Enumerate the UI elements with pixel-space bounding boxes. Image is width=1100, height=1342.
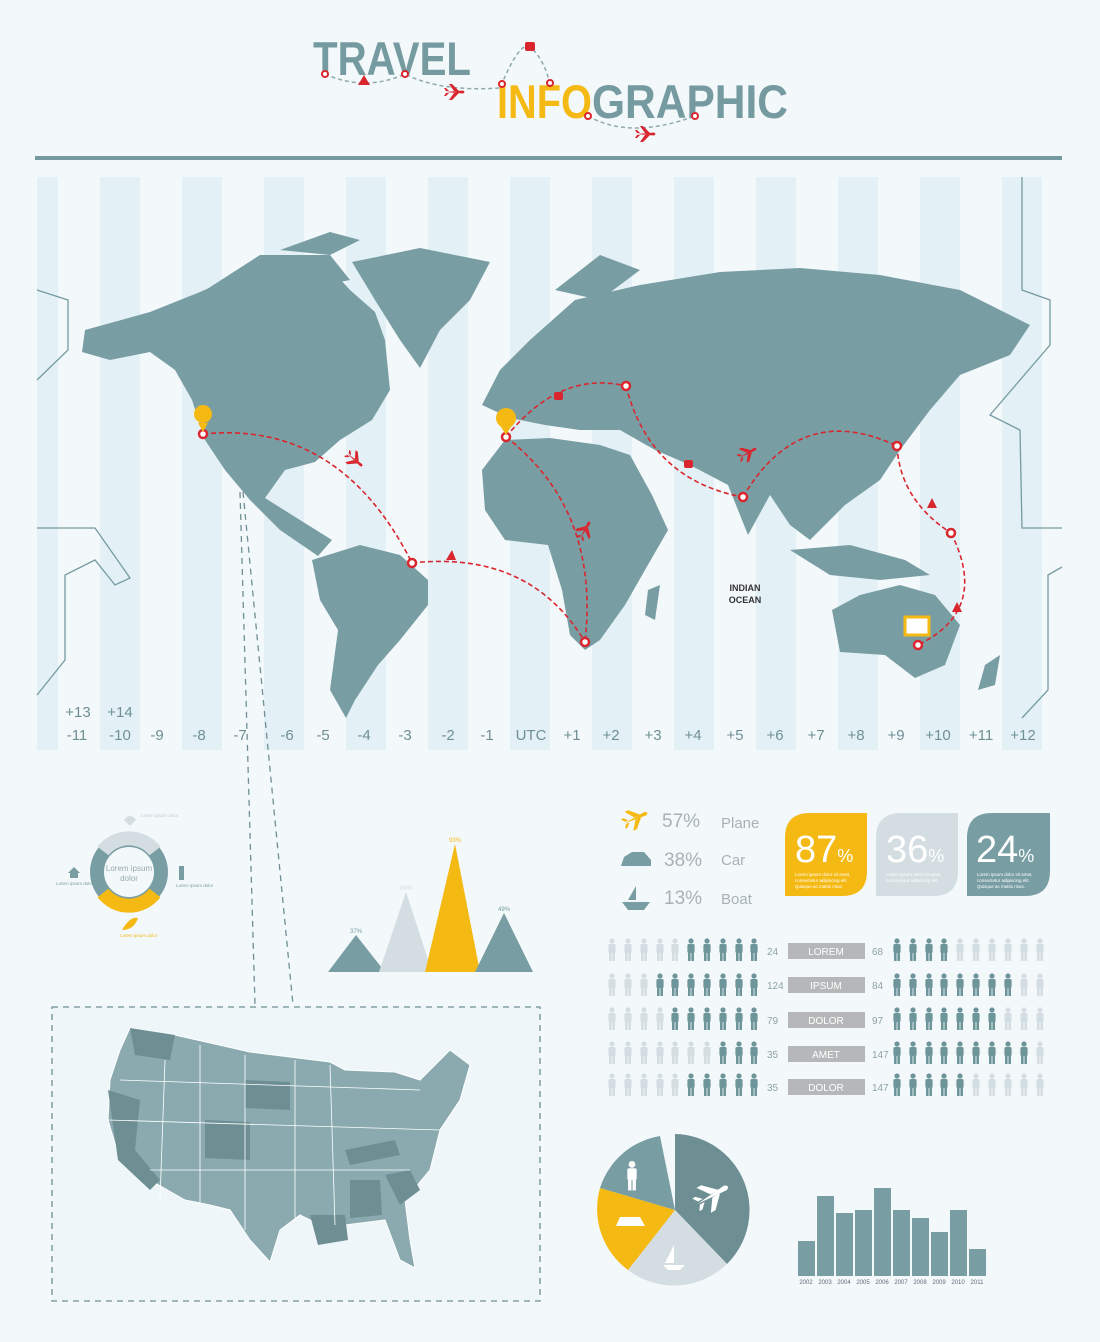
timezone labels: +13 bbox=[65, 704, 91, 721]
stat boxes: Lorem ipsum dolor sit amet, bbox=[795, 872, 851, 877]
transport legend bbox=[619, 803, 759, 910]
title: INFO bbox=[497, 75, 592, 128]
circle diagram: dolor bbox=[120, 874, 138, 883]
Australia bbox=[832, 585, 960, 678]
circle diagram: Lorem ipsum dolor bbox=[120, 933, 158, 938]
pins bbox=[194, 405, 929, 635]
stat boxes: 87% bbox=[795, 829, 853, 871]
timezone labels: +2 bbox=[602, 727, 620, 744]
timezone labels: -2 bbox=[441, 727, 455, 744]
timezone labels: -8 bbox=[192, 727, 206, 744]
people chart bbox=[608, 938, 1044, 1096]
Africa bbox=[482, 438, 668, 650]
transport legend: Car bbox=[721, 852, 745, 869]
timezone labels: -11 bbox=[67, 727, 87, 744]
bar chart: 2005 bbox=[856, 1280, 870, 1286]
people chart: DOLOR bbox=[808, 1016, 844, 1027]
stat boxes bbox=[785, 813, 1050, 896]
timezone labels: -5 bbox=[316, 727, 330, 744]
timezone labels: -10 bbox=[109, 727, 131, 744]
zoom lines bbox=[240, 492, 293, 1005]
stat boxes: consectetur adipiscing elit. bbox=[795, 878, 848, 883]
circle diagram: Lorem ipsum dolor bbox=[56, 881, 94, 886]
world map panel bbox=[37, 177, 1062, 750]
circle diagram bbox=[56, 813, 214, 938]
people chart: 147 bbox=[872, 1050, 889, 1061]
people chart: 84 bbox=[872, 981, 884, 992]
circle diagram: Lorem ipsum dolor bbox=[176, 883, 214, 888]
timezone labels: UTC bbox=[516, 727, 547, 744]
people chart: 24 bbox=[767, 947, 779, 958]
timezone labels: -1 bbox=[480, 727, 494, 744]
stat boxes: 24% bbox=[976, 829, 1034, 871]
bar chart: 2003 bbox=[818, 1280, 832, 1286]
S America bbox=[312, 545, 428, 718]
stat boxes: 36% bbox=[886, 829, 944, 871]
stat boxes: consectetur adipiscing elit. bbox=[886, 878, 939, 883]
timezone labels: +3 bbox=[644, 727, 662, 744]
people chart: 68 bbox=[872, 947, 884, 958]
timezone labels: +10 bbox=[925, 727, 951, 744]
bar chart: 2002 bbox=[799, 1280, 813, 1286]
timezone labels: +8 bbox=[847, 727, 865, 744]
triangle chart: 37% bbox=[350, 929, 363, 935]
transport legend: 38% bbox=[664, 850, 702, 871]
triangle chart bbox=[328, 838, 533, 972]
routes bbox=[203, 383, 965, 645]
transport legend: 57% bbox=[662, 811, 700, 832]
world map panel: INDIAN bbox=[730, 583, 760, 593]
triangle chart: 69% bbox=[400, 886, 413, 892]
stat boxes: Quisque ac mattis risus. bbox=[795, 884, 843, 889]
people chart: 147 bbox=[872, 1083, 889, 1094]
pie chart bbox=[597, 1134, 750, 1286]
people chart: 35 bbox=[767, 1083, 779, 1094]
timezone labels: +5 bbox=[726, 727, 744, 744]
US map panel bbox=[52, 1007, 540, 1301]
bar chart bbox=[798, 1188, 986, 1286]
stat boxes: consectetur adipiscing elit. bbox=[977, 878, 1030, 883]
timezone labels: +9 bbox=[887, 727, 905, 744]
title: GRAPHIC bbox=[592, 75, 788, 128]
timezone labels: -3 bbox=[398, 727, 412, 744]
people chart: 97 bbox=[872, 1016, 884, 1027]
title bbox=[313, 32, 788, 142]
bar chart: 2010 bbox=[951, 1280, 965, 1286]
triangle chart: 49% bbox=[498, 907, 511, 913]
N America bbox=[82, 262, 390, 556]
people chart: 79 bbox=[767, 1016, 779, 1027]
timezone labels: +1 bbox=[563, 727, 581, 744]
timezone labels: +12 bbox=[1010, 727, 1036, 744]
transport legend: Boat bbox=[721, 891, 753, 908]
people chart: AMET bbox=[812, 1050, 840, 1061]
stat boxes: Lorem ipsum dolor sit amet, bbox=[886, 872, 942, 877]
circle diagram: Lorem ipsum bbox=[106, 864, 152, 873]
SE Asia islands bbox=[790, 545, 930, 580]
people chart: DOLOR bbox=[808, 1083, 844, 1094]
bar chart: 2007 bbox=[894, 1280, 908, 1286]
timezone labels: +14 bbox=[107, 704, 133, 721]
triangle chart: 93% bbox=[449, 838, 462, 844]
timezone labels bbox=[65, 704, 1036, 744]
Eurasia bbox=[482, 268, 1030, 540]
stat boxes: Quisque ac mattis risus. bbox=[977, 884, 1025, 889]
people chart: LOREM bbox=[808, 947, 844, 958]
bar chart: 2008 bbox=[913, 1280, 927, 1286]
people chart: IPSUM bbox=[810, 981, 842, 992]
timezone labels: +7 bbox=[807, 727, 825, 744]
timezone labels: +6 bbox=[766, 727, 784, 744]
world map panel: OCEAN bbox=[729, 595, 761, 605]
timezone labels: +11 bbox=[969, 727, 993, 744]
timezone labels: +4 bbox=[684, 727, 702, 744]
people chart: 124 bbox=[767, 981, 784, 992]
circle diagram: Lorem ipsum dolor bbox=[141, 813, 179, 818]
transport legend: Plane bbox=[721, 815, 759, 832]
bar chart: 2009 bbox=[932, 1280, 946, 1286]
timezone labels: -7 bbox=[233, 727, 247, 744]
stat boxes: Lorem ipsum dolor sit amet, bbox=[977, 872, 1033, 877]
bar chart: 2011 bbox=[971, 1280, 984, 1286]
title: TRAVEL bbox=[313, 32, 471, 85]
people chart: 35 bbox=[767, 1050, 779, 1061]
bar chart: 2004 bbox=[837, 1280, 851, 1286]
bar chart: 2006 bbox=[875, 1280, 889, 1286]
timezone labels: -6 bbox=[280, 727, 294, 744]
transport legend: 13% bbox=[664, 888, 702, 909]
timezone labels: -9 bbox=[150, 727, 164, 744]
timezone labels: -4 bbox=[357, 727, 371, 744]
